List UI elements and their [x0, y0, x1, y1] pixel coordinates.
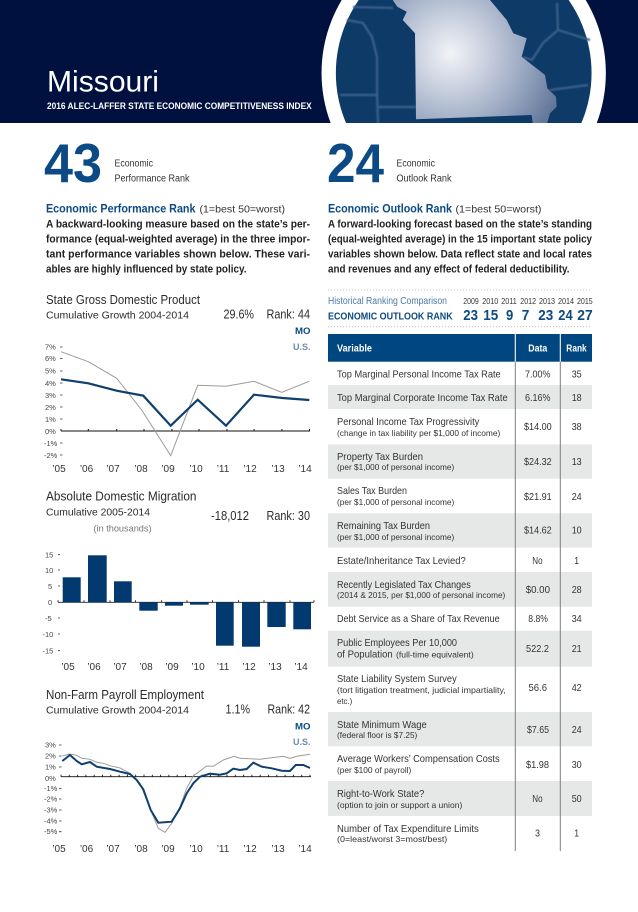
description text: (equal-weighted average) in the 15 important state policy [328, 234, 593, 246]
row: minimum wage: 24 [572, 724, 582, 736]
line chart: GDP: -1% [44, 439, 58, 448]
chart heading: Rank: 44 [266, 306, 310, 322]
bar chart: migration: ’05 [61, 662, 75, 673]
row: debt service: 34 [572, 613, 582, 625]
legend: MO [295, 326, 310, 337]
line chart: GDP: -2% [44, 451, 58, 460]
years: 2014 [558, 297, 574, 306]
ranks by year: 27 [577, 308, 593, 324]
chart heading: Rank: 30 [266, 508, 310, 523]
ranks by year: 24 [558, 308, 573, 324]
bar chart: migration: ’10 [191, 662, 205, 673]
description text: ables are highly influenced by state policy. [46, 264, 246, 276]
line chart: employment: ’14 [298, 844, 312, 855]
table: state policy variables [328, 334, 592, 851]
line chart: employment: -1% [44, 784, 58, 793]
description text: variables shown below. Data reflect state and local rates [328, 248, 592, 260]
row: corporate income tax rate: 6.16% [525, 392, 550, 404]
row: progressivity: (change in tax liability per $1,000 of income) [337, 428, 500, 438]
line chart: employment: -5% [44, 827, 58, 836]
row: estate tax [337, 555, 579, 567]
row: property tax: 13 [572, 456, 582, 468]
years: 2013 [539, 297, 555, 306]
big rank number 43: 43 [44, 132, 102, 194]
rank label [114, 158, 190, 184]
row: debt service: Debt Service as a Share of Tax Revenue [337, 613, 500, 625]
ranks by year: 23 [538, 308, 553, 324]
row: workers compensation: 30 [572, 759, 582, 771]
row: minimum wage: State Minimum Wage [337, 719, 427, 731]
row: property tax: Property Tax Burden [337, 451, 423, 463]
line chart: employment: -2% [44, 794, 58, 804]
subtitle: 2016 ALEC-LAFFER STATE ECONOMIC COMPETITIVENESS INDEX [47, 101, 312, 112]
row: corporate income tax rate: Top Marginal Corporate Income Tax Rate [337, 392, 508, 404]
row: workers compensation [337, 753, 582, 775]
row: public employees: (full-time equivalent) [396, 650, 474, 660]
ranks by year: 9 [506, 308, 513, 324]
chart heading: State Gross Domestic Product [46, 292, 200, 307]
row: estate tax: 1 [574, 555, 579, 567]
row: public employees: of Population [337, 649, 393, 661]
line chart: employment: ’08 [134, 844, 148, 855]
row: sales tax [337, 485, 582, 507]
row: right to work: No [532, 793, 543, 805]
row: public employees [337, 637, 582, 661]
line chart: employment: ’07 [106, 844, 120, 855]
line chart: GDP: ’11 [217, 464, 230, 475]
line chart: GDP: ’14 [298, 464, 312, 475]
line chart: GDP: ’06 [80, 464, 94, 475]
row: debt service: 8.8% [528, 613, 548, 625]
row: liability survey: (tort litigation treatment, judicial impartiality, [337, 685, 506, 695]
bar chart: migration: ’09 [165, 662, 179, 673]
heading: (1=best 50=worst) [200, 204, 285, 216]
legend [293, 326, 310, 353]
description text [46, 218, 310, 276]
row: property tax: (per $1,000 of personal income) [337, 462, 454, 472]
row: personal income tax rate: 35 [572, 368, 582, 380]
bar chart: migration: 0 [48, 598, 52, 607]
line chart: GDP: 4% [45, 379, 56, 388]
table header [328, 334, 592, 362]
heading [328, 202, 542, 216]
chart heading [46, 488, 310, 534]
rank label: Economic [396, 158, 435, 170]
row: tax expenditure limits [337, 823, 579, 844]
legend: U.S. [293, 342, 310, 353]
row: remaining tax: (per $1,000 of personal income) [337, 532, 454, 542]
row: estate tax: Estate/Inheritance Tax Levied? [337, 555, 466, 567]
bar chart: migration: ’07 [113, 662, 127, 673]
line chart: employment: ’11 [217, 844, 230, 855]
line chart: GDP: 1% [45, 415, 56, 424]
panel: historical ranking comparison [328, 290, 593, 327]
row: workers compensation: Average Workers’ Compensation Costs [337, 753, 500, 765]
row: liability survey: 56.6 [528, 682, 547, 694]
bar chart: migration: -15 [42, 646, 53, 656]
legend: MO [295, 722, 310, 732]
years: 2010 [482, 297, 499, 306]
icon: Missouri state map in circle [322, 0, 606, 123]
line chart: GDP: ’13 [271, 464, 285, 475]
line chart: employment: ’13 [271, 844, 285, 855]
row: public employees: 522.2 [526, 643, 549, 655]
row: recent tax changes: Recently Legislated Tax Changes [337, 579, 471, 591]
row: sales tax: 24 [572, 491, 582, 503]
description text: A backward-looking measure based on the state’s per- [46, 218, 310, 230]
ranks by year: 15 [483, 308, 498, 324]
row: property tax: $24.32 [524, 456, 552, 468]
chart heading: -18,012 [211, 508, 249, 523]
description text: tant performance variables shown below. These vari- [46, 248, 310, 260]
heading: Economic Performance Rank [46, 202, 196, 216]
bar chart: migration: -10 [42, 630, 53, 639]
table header: Data [528, 342, 547, 354]
chart heading: Cumulative 2005-2014 [46, 506, 150, 518]
chart heading: 1.1% [226, 702, 250, 716]
line chart: employment: ’10 [189, 844, 203, 855]
row: personal income tax rate: Top Marginal Personal Income Tax Rate [337, 368, 501, 380]
row: right to work: Right-to-Work State? [337, 788, 424, 800]
panel: economic outlook rank summary [327, 132, 593, 276]
row: tax expenditure limits: Number of Tax Expenditure Limits [337, 823, 479, 835]
legend: U.S. [293, 737, 310, 748]
row: right to work: (option to join or support a union) [337, 800, 462, 810]
description text [328, 218, 593, 276]
table header: Variable [337, 342, 372, 354]
bar chart: migration: ’06 [87, 662, 101, 673]
chart heading: (in thousands) [94, 524, 152, 534]
legend [293, 722, 310, 748]
ranks by year [463, 308, 593, 324]
row: liability survey: etc.) [337, 696, 352, 706]
panel: state gross domestic product [44, 292, 312, 475]
row: sales tax: (per $1,000 of personal income) [337, 497, 454, 507]
row: public employees: Public Employees Per 10,000 [337, 637, 457, 649]
bar chart: migration: ’08 [139, 662, 153, 673]
description text: formance (equal-weighted average) in the three impor- [46, 234, 310, 246]
row: tax expenditure limits: 3 [535, 828, 540, 840]
line chart: employment: ’06 [80, 844, 94, 855]
row: public employees: 21 [572, 643, 582, 655]
line chart: GDP: ’12 [243, 464, 257, 475]
row: sales tax: Sales Tax Burden [337, 485, 407, 497]
row: minimum wage: (federal floor is $7.25) [337, 730, 417, 740]
row: remaining tax: 10 [572, 525, 582, 537]
bar chart: migration: ’13 [268, 662, 282, 673]
line chart: GDP: ’08 [134, 464, 148, 475]
line chart: GDP: 6% [45, 354, 56, 363]
row: workers compensation: (per $100 of payroll) [337, 765, 411, 775]
row: progressivity: Personal Income Tax Progressivity [337, 416, 480, 428]
line chart: employment: 3% [45, 740, 56, 750]
line chart: GDP: 2% [45, 403, 56, 412]
chart heading: 29.6% [224, 306, 254, 322]
header banner [0, 0, 638, 123]
line chart: GDP: ’05 [52, 464, 66, 475]
panel: absolute domestic migration [42, 488, 314, 673]
rank label: Performance Rank [114, 174, 190, 184]
row: personal income tax rate: 7.00% [525, 368, 550, 380]
description text: A forward-looking forecast based on the state’s standing [328, 218, 592, 230]
bar chart: migration: ’12 [242, 662, 256, 673]
heading [46, 202, 285, 216]
heading: Economic Outlook Rank [328, 202, 452, 216]
big rank number 24: 24 [327, 132, 384, 194]
row: estate tax: No [532, 555, 543, 567]
chart heading: Rank: 42 [268, 702, 310, 716]
line chart: GDP [44, 342, 312, 475]
chart heading: Non-Farm Payroll Employment [46, 687, 204, 702]
line chart: employment: ’12 [243, 844, 257, 855]
line chart: GDP: ’07 [106, 464, 120, 475]
rank label: Outlook Rank [396, 174, 452, 184]
line chart: employment: 1% [45, 762, 56, 772]
line chart: employment [44, 740, 312, 855]
row: remaining tax: $14.62 [524, 525, 552, 537]
ranks by year: 7 [522, 308, 529, 324]
chart heading: Cumulative Growth 2004-2014 [46, 704, 189, 716]
chart heading [46, 687, 310, 716]
row: liability survey: 42 [572, 682, 582, 694]
panel: economic performance rank summary [44, 132, 310, 276]
line chart: GDP: 3% [45, 391, 56, 400]
row: minimum wage: $7.65 [527, 724, 549, 736]
bar chart: migration: 10 [45, 566, 53, 575]
row: liability survey [337, 673, 582, 706]
table header: Rank [566, 342, 587, 354]
row: progressivity: 38 [572, 421, 582, 433]
rank label: Economic [114, 158, 153, 170]
line chart: employment: ’09 [161, 844, 175, 855]
row: tax expenditure limits: (0=least/worst 3=most/best) [337, 834, 447, 844]
chart heading [46, 292, 310, 322]
years: 2015 [577, 297, 593, 306]
years [463, 297, 593, 306]
years: 2012 [520, 297, 536, 306]
row label: ECONOMIC OUTLOOK RANK [328, 310, 453, 322]
title: Missouri [47, 66, 159, 99]
rank label [396, 158, 452, 184]
bar chart: migration: ’11 [217, 662, 230, 673]
bar chart: migration: -5 [45, 614, 52, 623]
row: sales tax: $21.91 [524, 491, 552, 503]
ranks by year: 23 [463, 308, 478, 324]
panel: non-farm payroll employment [44, 687, 312, 855]
chart heading: Absolute Domestic Migration [46, 488, 196, 504]
line chart: employment: 0% [45, 774, 56, 783]
row: recent tax changes: $0.00 [526, 584, 550, 596]
row: workers compensation: $1.98 [526, 759, 549, 771]
line chart: employment: -3% [44, 806, 58, 814]
years: 2009 [463, 297, 479, 306]
line chart: employment: 2% [45, 752, 56, 760]
bar chart: migration: 15 [45, 550, 53, 560]
bar chart: migration: 5 [48, 582, 52, 591]
row: tax expenditure limits: 1 [574, 828, 579, 840]
chart heading: Cumulative Growth 2004-2014 [46, 310, 189, 322]
line chart: GDP: ’10 [189, 464, 203, 475]
row: recent tax changes [337, 579, 582, 600]
line chart: employment: ’05 [52, 844, 66, 855]
bar chart: migration: ’14 [294, 662, 308, 673]
description text: and revenues and any effect of federal deductibility. [328, 264, 570, 276]
row: minimum wage [337, 719, 582, 740]
line chart: employment: -4% [44, 816, 58, 826]
line chart: GDP: 0% [45, 427, 56, 436]
row: right to work: 50 [572, 793, 582, 805]
line chart: GDP: 5% [45, 366, 56, 376]
historical label: Historical Ranking Comparison [328, 296, 447, 307]
bar chart: migration [42, 550, 314, 673]
row: remaining tax [337, 520, 582, 542]
row: recent tax changes: (2014 & 2015, per $1,000 of personal income) [337, 590, 505, 600]
row: progressivity: $14.00 [524, 421, 552, 433]
row: remaining tax: Remaining Tax Burden [337, 520, 430, 532]
row: liability survey: State Liability System Survey [337, 673, 457, 685]
row: progressivity [337, 416, 582, 438]
heading: (1=best 50=worst) [456, 204, 542, 216]
row: right to work [337, 788, 582, 810]
line chart: GDP: 7% [45, 342, 56, 352]
years: 2011 [501, 297, 517, 306]
line chart: GDP: ’09 [161, 464, 175, 475]
row: recent tax changes: 28 [572, 584, 582, 596]
row: corporate income tax rate: 18 [572, 392, 582, 404]
row: property tax [337, 451, 582, 472]
